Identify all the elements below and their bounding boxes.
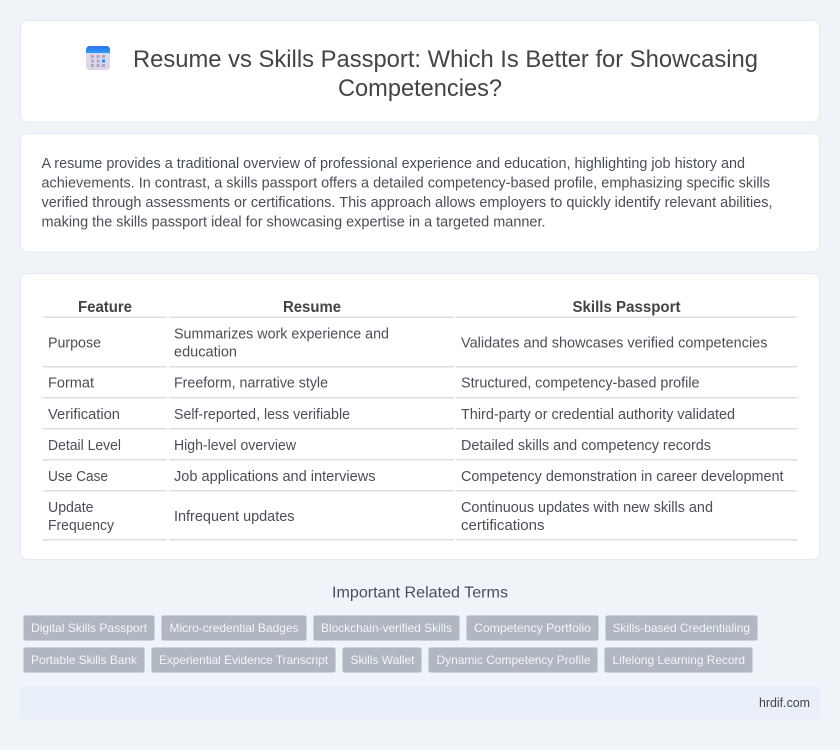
row: use case: Job applications and interviews — [174, 469, 376, 485]
table header row — [43, 299, 797, 318]
chip: lifelong learning record — [604, 648, 752, 672]
chip: skills-based credentialing: Skills-based Credentialing — [612, 621, 750, 635]
row: detail level: High-level overview — [174, 438, 297, 454]
title — [133, 46, 758, 102]
row: update frequency: Infrequent updates — [174, 509, 294, 525]
footer bar: hrdif.com — [759, 695, 810, 710]
panel: comparison table — [20, 274, 820, 560]
title: Resume vs Skills Passport: Which Is Better for Showcasing — [133, 46, 758, 73]
row: update frequency: certifications — [461, 518, 544, 534]
chip: experiential evidence transcript — [152, 648, 336, 672]
chip: micro-credential badges: Micro-credential Badges — [170, 621, 298, 635]
chip: lifelong learning record: Lifelong Learning Record — [612, 653, 745, 667]
heading: important related terms: Important Related Terms — [332, 584, 508, 602]
row: detail level: Detailed skills and competency records — [461, 438, 711, 454]
chip: blockchain-verified skills: Blockchain-verified Skills — [321, 621, 452, 635]
chip: blockchain-verified skills — [314, 616, 460, 640]
chip: digital skills passport — [24, 616, 154, 640]
chip: portable skills bank: Portable Skills Bank — [31, 653, 138, 667]
row: purpose: education — [174, 344, 237, 360]
chip: competency portfolio: Competency Portfolio — [474, 621, 591, 635]
row: detail level — [43, 438, 797, 460]
row: format — [43, 376, 797, 398]
row: update frequency: Continuous updates with new skills and — [461, 500, 713, 516]
row: format: Structured, competency-based profile — [461, 376, 700, 392]
panel: intro text — [20, 134, 820, 252]
intro paragraph: achievements. In contrast, a skills passport offers a detailed competency-based profile, emphasizing specific skills — [42, 176, 770, 192]
row: format: Freeform, narrative style — [174, 376, 328, 392]
chip: skills wallet — [342, 648, 422, 672]
intro paragraph: A resume provides a traditional overview of professional experience and education, highlighting job history and — [42, 156, 745, 172]
chip: digital skills passport: Digital Skills Passport — [31, 621, 148, 635]
row: use case: Competency demonstration in career development — [461, 469, 784, 485]
chip: skills wallet: Skills Wallet — [350, 653, 415, 667]
table header row: Resume — [283, 299, 341, 316]
chip: micro-credential badges — [162, 616, 306, 640]
row: purpose: Purpose — [48, 336, 101, 352]
intro paragraph — [42, 156, 772, 230]
intro paragraph: verified through assessments or certifications. This approach allows employers to quickly identify relevant abilities, — [42, 195, 772, 211]
row: update frequency: Frequency — [48, 518, 115, 534]
row: use case — [43, 469, 797, 492]
intro paragraph: making the skills passport ideal for showcasing expertise in a targeted manner. — [42, 214, 546, 230]
row: verification — [43, 407, 797, 430]
row: purpose: Summarizes work experience and — [174, 326, 389, 342]
table header row: Feature — [78, 299, 132, 316]
table header row: Skills Passport — [572, 299, 681, 316]
icon: calendar — [86, 46, 110, 70]
related term chips — [24, 616, 758, 672]
row: purpose — [43, 326, 797, 368]
row: update frequency: Update — [48, 500, 94, 516]
row: use case: Use Case — [48, 469, 108, 485]
row: verification: Third-party or credential authority validated — [461, 407, 735, 423]
chip: skills-based credentialing — [606, 616, 758, 640]
row: verification: Verification — [48, 407, 120, 423]
chip: competency portfolio — [466, 616, 598, 640]
title: Competencies? — [338, 75, 502, 102]
chip: portable skills bank — [24, 648, 144, 672]
chip: experiential evidence transcript: Experiential Evidence Transcript — [159, 653, 329, 667]
row: verification: Self-reported, less verifiable — [174, 407, 350, 423]
row: format: Format — [48, 376, 94, 392]
row: update frequency — [43, 500, 797, 540]
row: detail level: Detail Level — [48, 438, 121, 454]
footer bar — [20, 686, 820, 720]
panel: header — [20, 20, 820, 122]
chip: dynamic competency profile: Dynamic Competency Profile — [436, 653, 591, 667]
row: purpose: Validates and showcases verified competencies — [461, 336, 768, 352]
chip: dynamic competency profile — [428, 648, 598, 672]
